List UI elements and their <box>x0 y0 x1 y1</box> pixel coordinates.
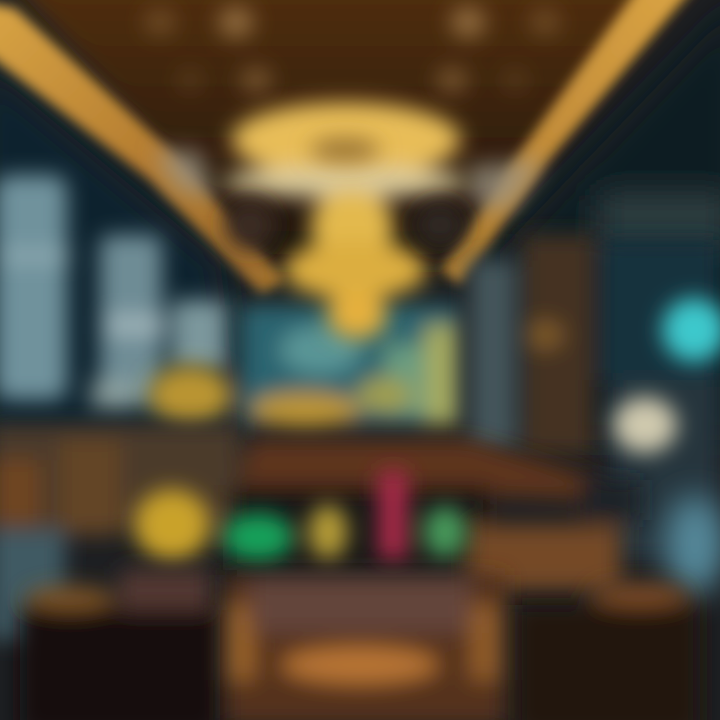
lower right blue panel <box>665 495 720 595</box>
center table <box>225 575 505 720</box>
ceiling <box>0 0 700 270</box>
gold ceiling beams <box>0 0 695 295</box>
light green bottle <box>423 506 467 558</box>
chandelier shadows <box>224 138 466 251</box>
green bottle <box>222 513 294 561</box>
ceiling lights <box>144 6 560 93</box>
central mural <box>148 305 460 428</box>
pale highlights on beams <box>155 150 545 210</box>
white lamp glow <box>613 397 677 453</box>
bar counter <box>0 425 640 640</box>
red bottle <box>378 470 408 560</box>
right columns and shelves <box>470 235 720 560</box>
chandelier <box>223 102 467 339</box>
pale yellow bottle <box>308 504 348 560</box>
left windows <box>0 175 227 410</box>
side walls <box>0 0 720 440</box>
yellow bottle <box>134 489 210 561</box>
cyan glow <box>662 298 720 362</box>
colored bottles <box>134 470 467 561</box>
tables <box>20 570 700 720</box>
